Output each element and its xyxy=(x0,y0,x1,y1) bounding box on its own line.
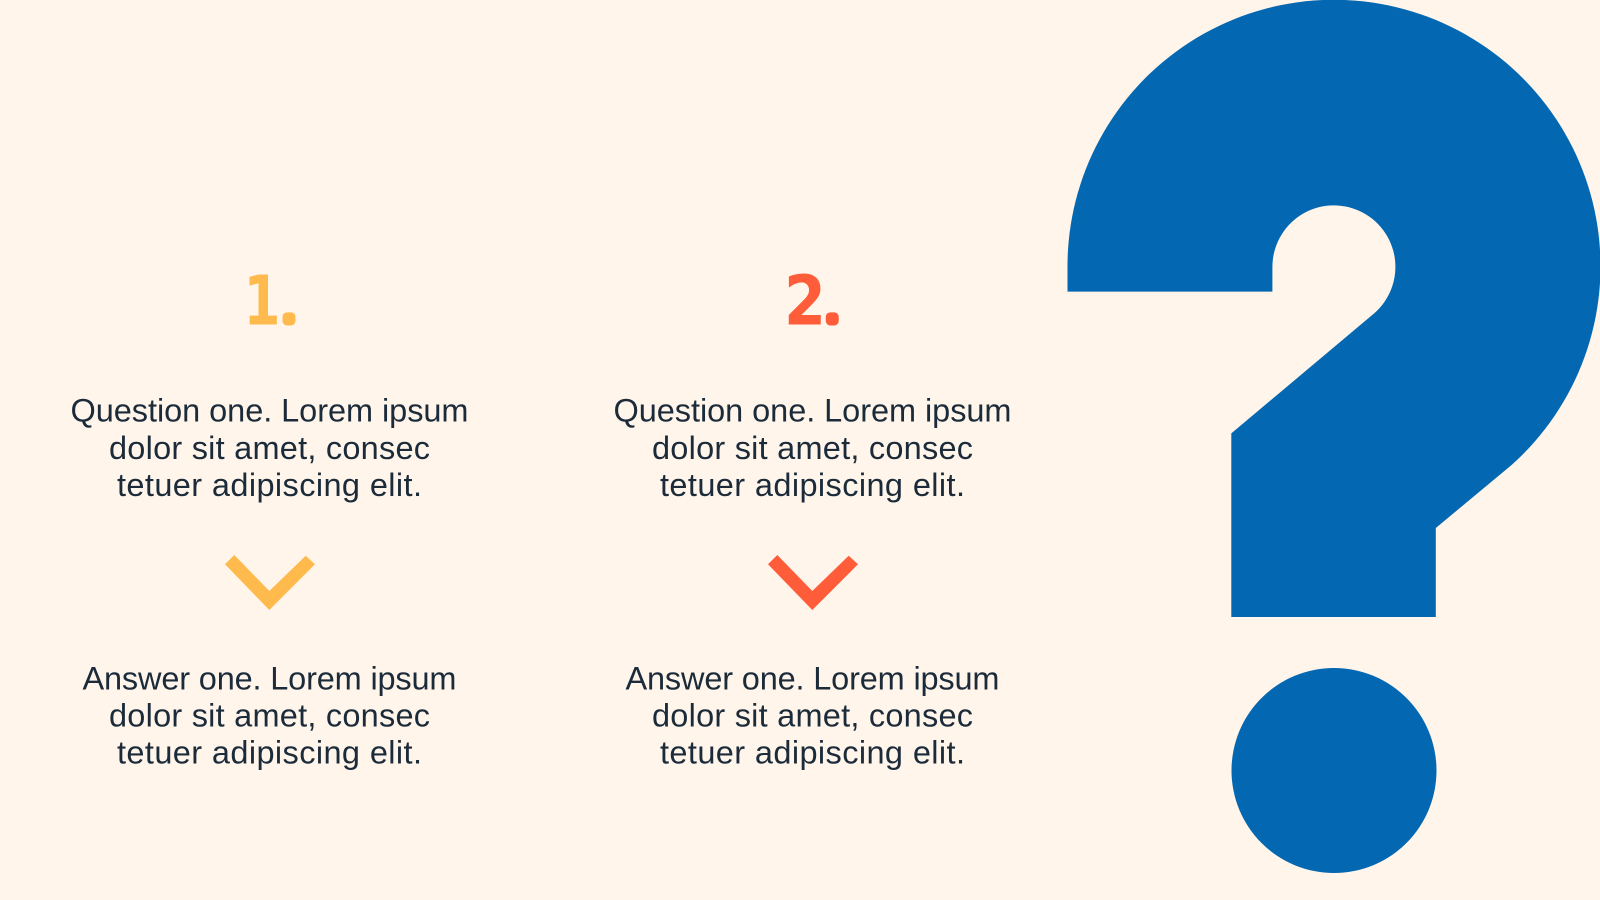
answer text 2: Answer one. Lorem ipsum xyxy=(626,660,1000,696)
panel: question 2 xyxy=(614,261,1012,770)
question text 1: Question one. Lorem ipsum xyxy=(70,393,468,429)
answer text 1 xyxy=(82,660,456,770)
question text 2: Question one. Lorem ipsum xyxy=(614,393,1012,429)
question text 1 xyxy=(70,393,468,503)
number 2: 2 xyxy=(784,261,826,341)
question mark dot xyxy=(1232,668,1436,873)
question text 2: dolor sit amet, consec xyxy=(652,430,973,466)
answer text 1: Answer one. Lorem ipsum xyxy=(82,660,456,696)
number 1: 1 xyxy=(244,261,280,341)
answer text 2: dolor sit amet, consec xyxy=(652,698,973,734)
question text 1: dolor sit amet, consec xyxy=(109,430,430,466)
panel: question 1 xyxy=(70,261,468,770)
answer text 2 xyxy=(626,660,1000,770)
answer text 1: dolor sit amet, consec xyxy=(109,698,430,734)
icon: chevron down yellow xyxy=(225,555,315,610)
question text 2 xyxy=(614,393,1012,503)
answer text 1: tetuer adipiscing elit. xyxy=(117,734,422,770)
question mark hook xyxy=(1067,0,1600,617)
question text 1: tetuer adipiscing elit. xyxy=(117,467,422,503)
icon: chevron down orange xyxy=(768,555,858,610)
question text 2: tetuer adipiscing elit. xyxy=(660,467,965,503)
number 1: . xyxy=(285,296,293,327)
number 2: . xyxy=(828,296,836,327)
answer text 2: tetuer adipiscing elit. xyxy=(660,734,965,770)
icon: large question mark xyxy=(1067,0,1600,873)
